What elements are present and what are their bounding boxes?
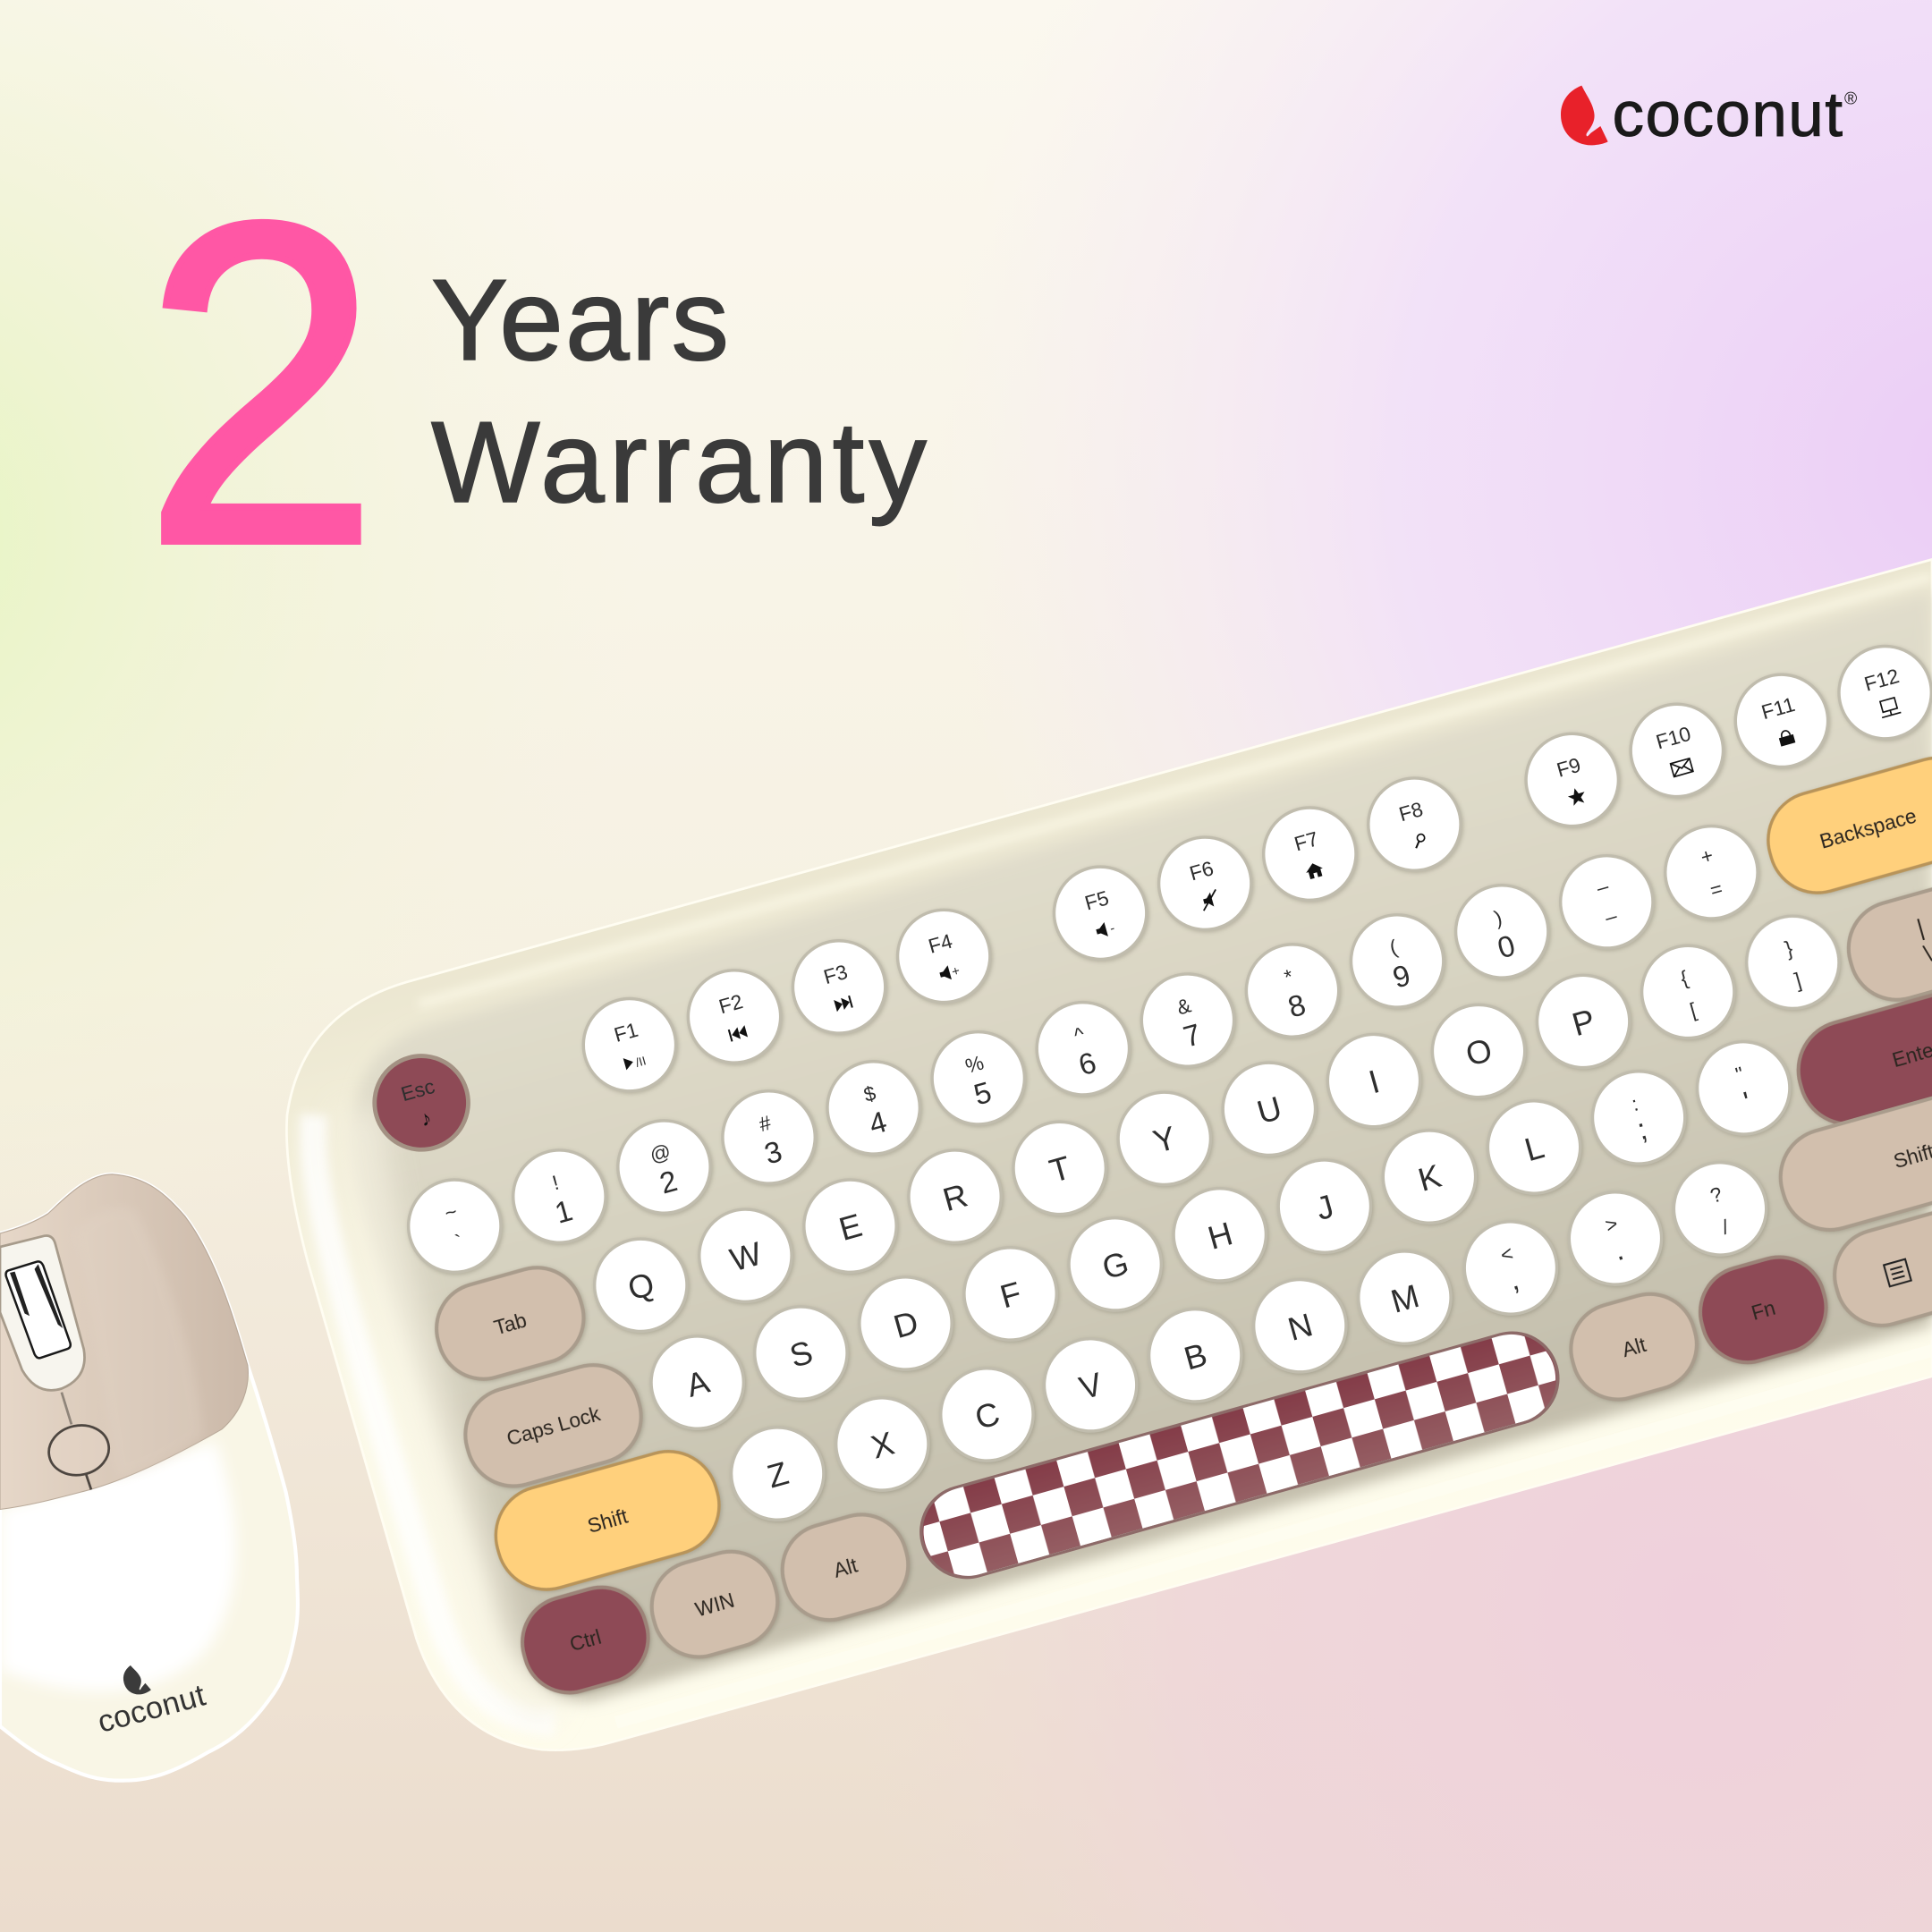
QWERTY row keys: P: [1568, 1002, 1599, 1043]
keyboard top rim highlight: [419, 577, 1932, 1004]
mouse logo: [86, 1648, 209, 1740]
coconut logo: [1561, 79, 1857, 149]
divider line upper: [62, 1393, 72, 1424]
registered mark: ®: [1844, 90, 1857, 109]
QWERTY row keys: R: [939, 1177, 971, 1218]
QWERTY row keys: ]: [1792, 969, 1804, 992]
function keys F1 to F12: F7: [1292, 826, 1321, 855]
function keys F1 to F12: F8: [1396, 797, 1426, 826]
mouse logo text: coconut: [94, 1678, 209, 1740]
home row keys: ": [1733, 1062, 1746, 1086]
key: Ctrl: Ctrl: [567, 1624, 604, 1656]
key: Enter: [1787, 970, 1932, 1136]
number row keys: 2: [657, 1165, 681, 1201]
esc key: ♪: [418, 1106, 434, 1131]
esc key: Esc: [398, 1074, 437, 1106]
QWERTY row keys: [584, 905, 1850, 1342]
mouse logo drop: [120, 1662, 151, 1698]
QWERTY row keys: Q: [623, 1265, 658, 1308]
heading: Years Warranty: [431, 256, 927, 527]
key: WIN: [641, 1541, 788, 1667]
bottom letter row keys: <: [1498, 1241, 1515, 1267]
bottom letter row keys: /: [1719, 1215, 1732, 1239]
keyboard key deck: [353, 590, 1932, 1700]
QWERTY row keys: {: [1678, 966, 1690, 990]
key: left Shift: [484, 1440, 731, 1601]
function keys F1 to F12: F5: [1082, 886, 1111, 915]
number row keys: @: [647, 1139, 674, 1167]
bottom letter row keys: M: [1387, 1277, 1423, 1320]
home row keys: ;: [1634, 1113, 1650, 1147]
number row keys: 6: [1075, 1046, 1100, 1082]
QWERTY row keys: [: [1687, 998, 1699, 1021]
mouse body: [0, 1174, 298, 1781]
mouse round button: [44, 1419, 114, 1480]
number row keys: 8: [1284, 988, 1309, 1025]
bottom letter row keys: Z: [763, 1454, 792, 1496]
number row keys: %: [962, 1050, 987, 1078]
home row keys: D: [890, 1303, 922, 1345]
number row keys: 3: [761, 1135, 785, 1172]
number row keys: !: [549, 1171, 562, 1194]
keyboard bright left band: [313, 1115, 555, 1723]
home row keys: ': [1741, 1086, 1755, 1119]
QWERTY row keys: }: [1783, 936, 1795, 961]
key: menu: [1824, 1200, 1932, 1336]
key: left Alt: [772, 1504, 919, 1631]
number row keys: 4: [866, 1106, 891, 1141]
number row keys: 1: [552, 1194, 576, 1231]
home row keys: L: [1521, 1128, 1548, 1168]
key: Ctrl: [512, 1577, 659, 1703]
number row keys: 5: [970, 1076, 996, 1112]
heading: Years Warranty: Warranty: [431, 398, 927, 527]
home row keys: G: [1098, 1244, 1132, 1286]
number row keys: ): [1492, 905, 1504, 929]
bottom letter row keys: N: [1284, 1306, 1317, 1348]
function keys F1 to F12: +: [950, 963, 962, 980]
esc key: [364, 1045, 479, 1160]
function keys F1 to F12: F9: [1554, 753, 1583, 782]
key: backslash: [1838, 872, 1932, 1011]
number row keys: –: [1602, 903, 1620, 929]
wheel dark sides: [10, 1264, 63, 1328]
keyboard: [286, 559, 1932, 1750]
number row keys: ~: [442, 1199, 460, 1224]
function keys F1 to F12: F4: [926, 929, 954, 958]
key: Caps Lock: [454, 1354, 652, 1497]
divider line lower: [86, 1475, 91, 1489]
key: checkered spacebar: [911, 1322, 1569, 1588]
home row keys: A: [682, 1363, 714, 1404]
big pink number 2: 2: [143, 129, 379, 639]
key: Backspace: Backspace: [1817, 803, 1919, 853]
bottom letter row keys: .: [1610, 1233, 1627, 1267]
number row keys: [398, 816, 1768, 1283]
bottom letter row keys: C: [971, 1394, 1004, 1436]
bottom letter row keys: V: [1075, 1365, 1106, 1407]
function keys F1 to F12: F10: [1653, 722, 1693, 753]
home row keys: K: [1414, 1157, 1445, 1199]
key: Tab: [426, 1257, 594, 1390]
key: Caps Lock: Caps Lock: [504, 1402, 603, 1450]
function keys F1 to F12: [572, 635, 1932, 1102]
number row keys: –: [1594, 874, 1611, 900]
key: Fn: Fn: [1749, 1295, 1778, 1325]
number row keys: 7: [1180, 1018, 1205, 1055]
key: backslash: |: [1914, 914, 1927, 942]
function keys F1 to F12: -: [1108, 920, 1116, 936]
heading: Years Warranty: Years: [431, 256, 729, 385]
QWERTY row keys: T: [1046, 1148, 1074, 1190]
function keys F1 to F12: F2: [716, 989, 745, 1018]
key: right Alt: [1560, 1284, 1707, 1410]
key: Fn: [1690, 1247, 1836, 1373]
bottom letter row keys: [721, 1152, 1777, 1530]
QWERTY row keys: O: [1462, 1031, 1496, 1073]
home row keys: H: [1204, 1215, 1236, 1257]
scroll wheel: [6, 1261, 71, 1358]
key: left Shift: Shift: [585, 1504, 631, 1538]
number row keys: *: [1282, 964, 1296, 989]
function keys F1 to F12: F12: [1861, 664, 1902, 696]
mouse tan top cap: [0, 1174, 248, 1509]
key: right Alt: Alt: [1619, 1333, 1649, 1361]
home row keys: S: [785, 1334, 817, 1375]
number row keys: (: [1387, 935, 1400, 959]
key: WIN: WIN: [692, 1588, 737, 1621]
home row keys: J: [1312, 1188, 1338, 1227]
number row keys: +: [1698, 843, 1716, 869]
home row keys: [640, 1031, 1801, 1439]
bottom letter row keys: ,: [1505, 1263, 1522, 1297]
number row keys: $: [861, 1080, 878, 1106]
keyboard outer shell: [286, 559, 1932, 1750]
mouse: [0, 1174, 298, 1781]
home row keys: :: [1629, 1091, 1640, 1115]
mouse shell white highlight: [0, 1442, 235, 1691]
bottom letter row keys: X: [867, 1425, 898, 1466]
number row keys: 9: [1389, 959, 1414, 996]
function keys F1 to F12: F6: [1187, 856, 1216, 885]
number row keys: ^: [1072, 1022, 1087, 1047]
QWERTY row keys: U: [1253, 1089, 1285, 1131]
cap reflections: [74, 1208, 203, 1479]
key: left Alt: Alt: [831, 1553, 860, 1582]
key: Tab: Tab: [491, 1308, 530, 1339]
function keys F1 to F12: F3: [821, 960, 850, 988]
number row keys: `: [453, 1230, 465, 1254]
bottom letter row keys: B: [1180, 1336, 1211, 1377]
bottom letter row keys: >: [1603, 1211, 1620, 1237]
number row keys: #: [757, 1110, 774, 1136]
wordmark: coconut: [1613, 79, 1843, 149]
scroll wheel housing: [0, 1236, 85, 1390]
key: Backspace: [1757, 747, 1932, 904]
icon: red coconut drop: [1561, 86, 1608, 145]
deck left glow: [360, 1109, 555, 1707]
function keys F1 to F12: F1: [612, 1018, 640, 1046]
number row keys: 0: [1494, 929, 1519, 965]
keyboard bottom rim line: [616, 1351, 1932, 1723]
function keys F1 to F12: F11: [1758, 692, 1797, 724]
QWERTY row keys: Y: [1149, 1119, 1180, 1160]
QWERTY row keys: I: [1365, 1063, 1384, 1100]
home row keys: F: [996, 1275, 1025, 1315]
QWERTY row keys: E: [835, 1207, 866, 1248]
key: right Shift: [1769, 1071, 1932, 1241]
function keys F1 to F12: /II: [634, 1054, 648, 1070]
number row keys: &: [1174, 993, 1193, 1020]
number row keys: =: [1707, 877, 1725, 902]
QWERTY row keys: W: [726, 1234, 766, 1278]
product scene in display coordinates: [0, 559, 1932, 1781]
bottom letter row keys: ?: [1707, 1182, 1724, 1208]
